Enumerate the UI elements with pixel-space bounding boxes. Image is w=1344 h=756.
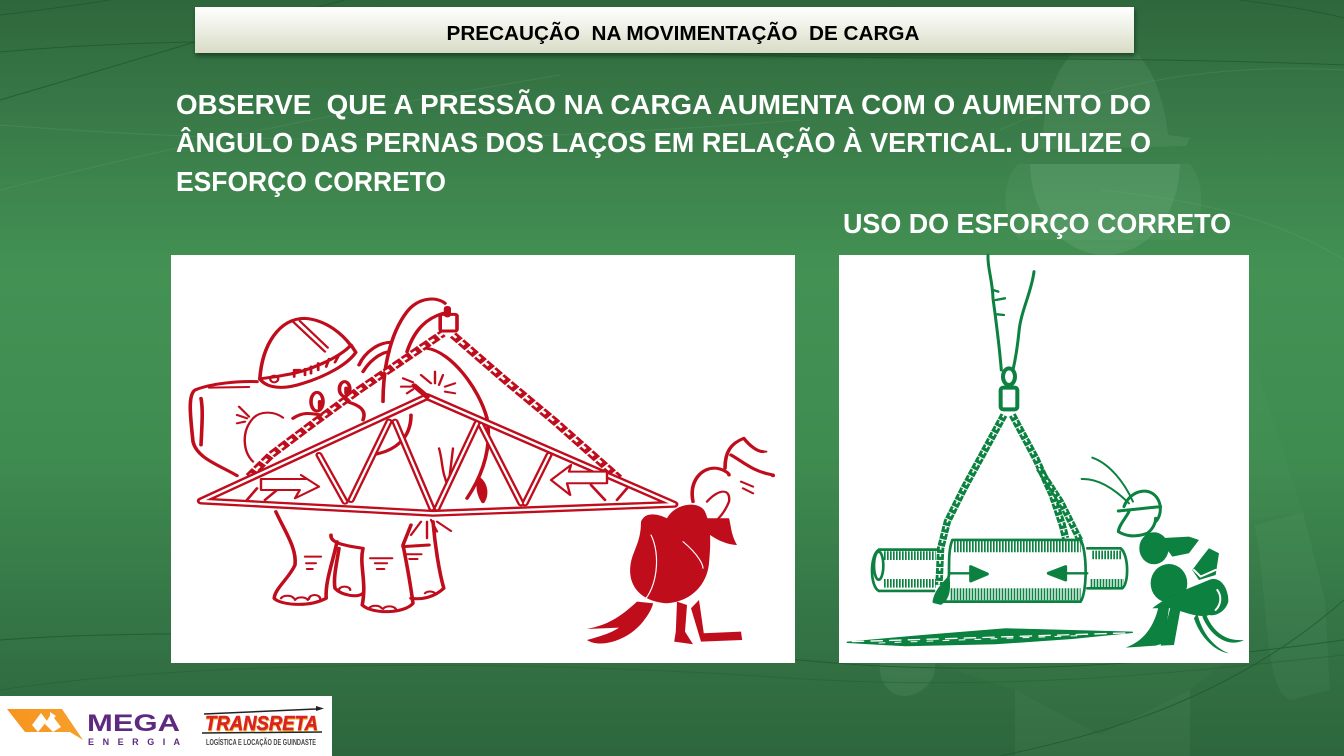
truss frame xyxy=(201,386,674,513)
logo: Transreta xyxy=(202,706,324,747)
main explanatory text xyxy=(176,89,1151,197)
panel: correct lifting, green drawing xyxy=(839,255,1249,663)
elephant: legs xyxy=(274,512,444,612)
cylinder load xyxy=(872,540,1127,603)
logo tagline: E N E R G I A xyxy=(88,737,180,747)
elephant: helmet xyxy=(260,318,356,387)
force arrow, right xyxy=(551,465,607,495)
chain, left leg xyxy=(939,415,1004,585)
ant helmeted head xyxy=(1118,491,1161,536)
main explanatory text: ÂNGULO DAS PERNAS DOS LAÇOS EM RELAÇÃO À VERTICAL. UTILIZE O xyxy=(176,127,1151,158)
hook shackle xyxy=(440,307,457,331)
background watermark: worker figure xyxy=(880,38,1330,756)
chain, right leg xyxy=(1012,415,1081,542)
green ant xyxy=(1082,458,1244,653)
crane hook arm xyxy=(988,255,1034,370)
main explanatory text: OBSERVE QUE A PRESSÃO NA CARGA AUMENTA COM O AUMENTO DO xyxy=(176,89,1151,120)
logo: Transreta: TRANSRETA xyxy=(205,713,318,735)
ground shadow xyxy=(847,629,1132,646)
logo: Transreta: LOGÍSTICA E LOCAÇÃO DE GUINDASTE xyxy=(206,738,316,747)
elephant: trunk over chain xyxy=(383,299,488,502)
logo: Transreta: TRANSRETA xyxy=(206,714,318,736)
title text: PRECAUÇÃO NA MOVIMENTAÇÃO DE CARGA xyxy=(446,22,920,45)
sling chain, right leg xyxy=(453,335,619,478)
stress sparks at truss centre xyxy=(411,520,451,538)
panel: incorrect lifting, red drawing xyxy=(171,255,795,663)
subheading: correct effort: USO DO ESFORÇO CORRETO xyxy=(843,208,1231,239)
elephant: head and ear xyxy=(190,342,411,476)
shackle xyxy=(1001,368,1017,409)
sling chain, left leg xyxy=(249,333,443,477)
logo mark xyxy=(7,709,83,740)
force arrow, left xyxy=(261,475,319,498)
ant antennae xyxy=(1082,458,1133,503)
ant body xyxy=(1126,532,1244,653)
logo wordmark: MEGA xyxy=(87,710,180,737)
footer logo strip xyxy=(0,696,332,756)
title bar xyxy=(195,7,1134,53)
red ant xyxy=(587,438,775,644)
logo: Mega Energia xyxy=(7,709,180,747)
main explanatory text: ESFORÇO CORRETO xyxy=(176,166,446,197)
